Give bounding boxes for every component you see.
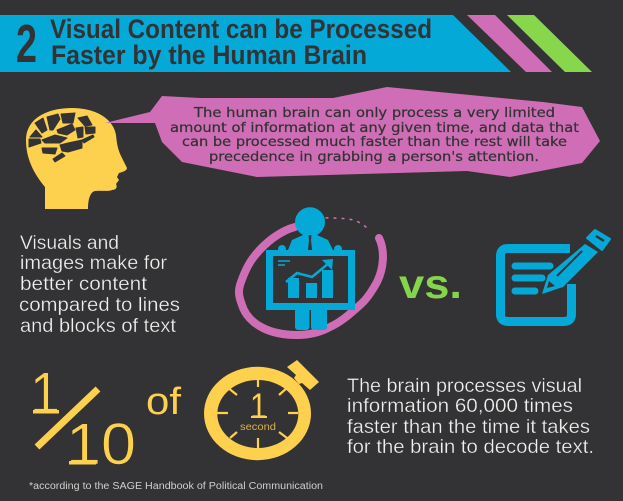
brush ring [239,218,383,335]
section number: 2 [16,14,37,74]
text block: 60,000 times faster [347,375,594,458]
callout: speech bubble [105,87,600,177]
callout text: amount of information at any given time, and data that [170,120,579,136]
callout text: can be processed much faster than the rest will take [182,134,567,150]
footnote: *according to the SAGE Handbook of Political Communication [29,481,323,492]
statistic: one tenth of: 1 [30,361,60,426]
icon: head with brain [26,108,127,209]
title: Faster by the Human Brain [51,40,367,70]
icon: presenter with chart inside pink circle [239,207,383,335]
statistic: one tenth of [30,361,181,477]
text block: 60,000 times faster: information 60,000 times [347,395,573,417]
header banner [0,14,592,74]
statistic: one tenth of: 10 [66,412,136,477]
icon: stopwatch one second: second [240,422,276,433]
text block: 60,000 times faster: faster than the time it takes [347,416,590,438]
icon: note and pencil [500,230,610,322]
icon: stopwatch one second [204,360,319,460]
vs label: vs. [399,261,462,307]
title [50,14,432,70]
text block: 60,000 times faster: The brain processes visual [347,375,582,397]
title: Visual Content can be Processed [50,14,432,44]
text block: visuals and images: compared to lines [19,294,180,316]
statistic: one tenth of: of [146,381,181,423]
text block: visuals and images: better content [20,273,148,295]
text block: visuals and images: images make for [20,252,168,274]
text block: visuals and images [19,232,180,337]
callout text [170,105,579,165]
text block: visuals and images: and blocks of text [20,315,177,337]
icon: stopwatch one second: 1 [250,387,267,426]
callout text: The human brain can only process a very limited [193,105,555,121]
callout text: precedence in grabbing a person's attention. [209,149,539,165]
text block: 60,000 times faster: for the brain to decode text. [347,436,594,458]
text block: visuals and images: Visuals and [20,232,119,254]
